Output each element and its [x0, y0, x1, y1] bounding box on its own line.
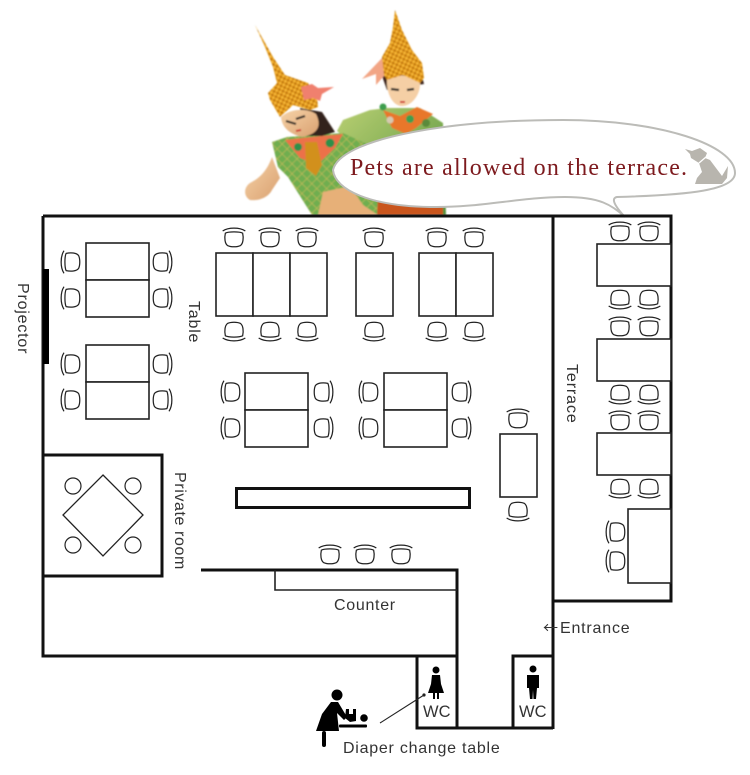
label: WC women: WC	[423, 703, 451, 721]
label: projector: Projector	[14, 283, 31, 354]
icon: women's WC	[428, 666, 444, 699]
leader line: diaper table to women's WC	[380, 693, 426, 723]
counter	[275, 545, 457, 590]
label: entrance: ←Entrance	[543, 617, 630, 638]
icon: men's WC	[527, 666, 539, 699]
private room stools	[65, 478, 141, 553]
label: table: Table	[185, 301, 202, 343]
bubble text: Pets are allowed on the terrace.	[350, 155, 688, 181]
label: counter: Counter	[334, 597, 396, 614]
private room table	[63, 475, 143, 556]
callout: pets allowed speech bubble	[333, 120, 735, 217]
label: private room: Private room	[171, 472, 188, 570]
tables: top row	[216, 228, 493, 341]
terrace tables	[597, 222, 671, 583]
projector	[43, 269, 49, 364]
icon: diaper change table	[316, 690, 368, 747]
icon: dog	[685, 148, 728, 184]
label: diaper change table: Diaper change table	[343, 740, 500, 757]
front dancer	[245, 25, 380, 215]
label: WC men: WC	[519, 703, 547, 721]
long table	[236, 488, 470, 508]
table: single by terrace wall	[500, 409, 537, 521]
back dancer	[337, 10, 446, 215]
tables: middle row	[221, 373, 471, 447]
panel: private room	[43, 455, 162, 576]
label: terrace: Terrace	[563, 364, 580, 424]
illustration: Thai dancer figurines	[245, 10, 446, 215]
floor plan walls	[43, 216, 671, 729]
tables: left column	[61, 243, 172, 419]
